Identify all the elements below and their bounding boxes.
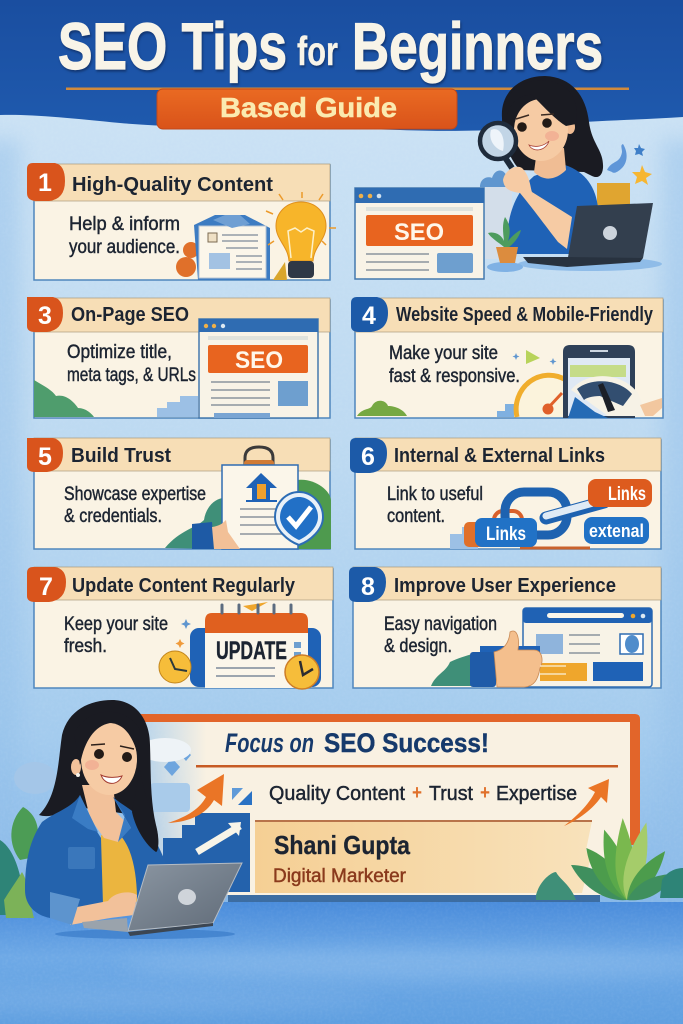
icon: growth stairs	[163, 750, 252, 892]
badge 6: 6	[361, 443, 375, 471]
badge 5	[27, 438, 63, 472]
yellow pot and decorations	[597, 144, 652, 205]
icon: leaves	[431, 654, 472, 686]
badge 1	[27, 163, 65, 201]
heading 8: Improve User Experience	[394, 575, 616, 597]
icon: check shield	[275, 492, 323, 545]
body text 5	[64, 484, 206, 527]
laptop	[523, 203, 653, 267]
badge 6	[350, 438, 387, 473]
jacket cuff	[50, 892, 80, 925]
body text 1: your audience.	[69, 237, 180, 258]
title	[58, 9, 603, 83]
formula line: +	[412, 782, 422, 804]
badge 4: 4	[362, 302, 376, 330]
body text 8	[384, 614, 497, 657]
breast pocket	[68, 847, 95, 869]
orange frame	[139, 714, 640, 845]
icon: clock right	[285, 655, 319, 689]
body text 4: fast & responsive.	[389, 366, 520, 387]
icon: calendar	[190, 602, 321, 688]
author strip: Digital Marketer	[273, 866, 407, 887]
illustration: right plants	[536, 818, 683, 908]
tag: blue links: Links	[486, 524, 526, 545]
ear	[565, 120, 575, 134]
formula line	[269, 782, 577, 805]
author strip	[255, 820, 592, 893]
title: SEO Tips	[58, 9, 287, 83]
icon: yellow speedometer	[497, 374, 566, 417]
formula line: Trust	[429, 783, 473, 805]
hair	[39, 700, 158, 852]
badge 5: 5	[38, 443, 52, 471]
formula line: +	[480, 782, 490, 804]
yellow top	[101, 826, 137, 902]
body text 6: Link to useful	[387, 484, 483, 505]
header band	[0, 0, 683, 131]
face	[81, 723, 137, 795]
arm and hand	[503, 167, 572, 249]
icon: hand hint	[640, 398, 662, 416]
blue shirt	[508, 165, 601, 254]
illustration: woman with magnifier	[480, 76, 662, 272]
heading 1: High-Quality Content	[72, 174, 273, 196]
icon: document	[194, 215, 270, 280]
icon: hand and cuff	[192, 520, 240, 549]
magnifier	[480, 123, 516, 168]
eyes and smile	[516, 114, 559, 150]
body text 8: Easy navigation	[384, 614, 497, 635]
formula line: Expertise	[496, 783, 577, 805]
fringe	[74, 712, 140, 765]
body text 6	[387, 484, 483, 527]
card 2: SEO browser window: SEO	[394, 219, 444, 246]
icon: dark gauge	[568, 376, 647, 418]
illustration: left plants	[0, 807, 38, 918]
tag: blue links	[464, 518, 537, 547]
arrow: left orange	[168, 774, 224, 823]
heading 3: On-Page SEO	[71, 304, 189, 326]
body text 3: meta tags, & URLs	[67, 365, 196, 386]
body text 6: content.	[387, 506, 445, 527]
body text 5: & credentials.	[64, 506, 162, 527]
body text 4	[389, 343, 520, 387]
icon: browser	[523, 608, 652, 687]
blue cloud	[480, 170, 513, 188]
card 4: website speed and mobile-friendly	[351, 297, 663, 418]
card 3: on-page SEO	[27, 297, 330, 418]
card 8: improve user experience	[349, 567, 661, 688]
card 7: update content regularly	[27, 567, 333, 689]
eyes and smile	[85, 744, 134, 783]
fringe	[502, 80, 577, 126]
heading	[225, 728, 489, 758]
card 1: high-quality content	[27, 163, 336, 280]
illustration: woman with laptop	[25, 700, 242, 939]
icon: chain links	[450, 492, 604, 549]
heading 6: Internal & External Links	[394, 445, 605, 467]
body text 7: fresh.	[64, 636, 107, 657]
title: Beginners	[352, 9, 603, 83]
icon: SEO browser: SEO	[235, 347, 283, 374]
icon: calendar: UPDATE	[216, 637, 287, 665]
icon: light bulb	[266, 192, 336, 280]
icon: clock left	[159, 651, 191, 683]
forearm and hand	[70, 892, 137, 925]
icon: shrub	[357, 401, 407, 416]
tag: orange links	[588, 479, 652, 507]
badge 8	[349, 567, 386, 602]
small potted plant	[488, 217, 521, 263]
grey panel behind	[485, 187, 512, 259]
icon: sparkles	[176, 619, 191, 648]
author strip: Shani Gupta	[274, 830, 410, 860]
badge 7	[27, 567, 66, 602]
puddle	[487, 262, 523, 272]
heading 7: Update Content Regularly	[72, 575, 296, 597]
badge 4	[351, 297, 388, 332]
icon: orange blobs	[176, 242, 199, 277]
face	[514, 99, 568, 161]
neck	[82, 785, 131, 842]
neck	[534, 148, 566, 179]
icon: sparkles	[512, 353, 556, 365]
tag: external: extenal	[589, 521, 644, 541]
body text 3: Optimize title,	[67, 342, 172, 363]
badge 1: 1	[38, 169, 52, 197]
subtitle banner	[66, 88, 629, 129]
heading 5: Build Trust	[71, 445, 171, 467]
illustration: cloud behind woman	[14, 738, 191, 794]
badge 7: 7	[39, 573, 53, 601]
card 2: SEO browser window	[355, 188, 484, 279]
faint document	[150, 783, 190, 812]
badge 3: 3	[38, 302, 52, 330]
icon: phone	[563, 345, 635, 418]
formula line: Quality Content	[269, 783, 405, 805]
hair strand	[132, 770, 158, 852]
body text 7: Keep your site	[64, 614, 168, 635]
body text 1: Help & inform	[69, 214, 180, 235]
title: for	[297, 28, 338, 74]
badge 3	[27, 297, 63, 332]
arrow: right orange	[564, 779, 609, 826]
icon: SEO browser	[199, 319, 318, 418]
card 5: build trust	[27, 438, 331, 549]
icon: clipboard	[222, 447, 298, 549]
body text 5: Showcase expertise	[64, 484, 206, 505]
tag: external	[584, 517, 649, 544]
body text 4: Make your site	[389, 343, 498, 364]
laptop	[55, 863, 242, 939]
body text 8: & design.	[384, 636, 452, 657]
denim jacket	[25, 795, 103, 918]
hair	[502, 76, 603, 177]
subtitle banner: Based Guide	[220, 92, 397, 123]
heading: Focus on	[225, 728, 314, 758]
icon: plant and bars	[34, 380, 198, 417]
badge 8: 8	[361, 573, 375, 601]
icon: thumbs up	[470, 631, 566, 687]
body text 3	[67, 342, 196, 386]
heading: SEO Success!	[324, 728, 489, 758]
body text 1	[69, 214, 180, 258]
panel: focus on SEO success	[139, 714, 640, 902]
tag: orange links: Links	[608, 484, 646, 505]
card 6: internal and external links	[350, 438, 661, 549]
desk shadow	[518, 257, 662, 271]
icon: green leaves	[165, 480, 331, 549]
body text 7	[64, 614, 168, 657]
icon: play triangle	[526, 350, 540, 364]
ear and earring	[71, 759, 81, 777]
